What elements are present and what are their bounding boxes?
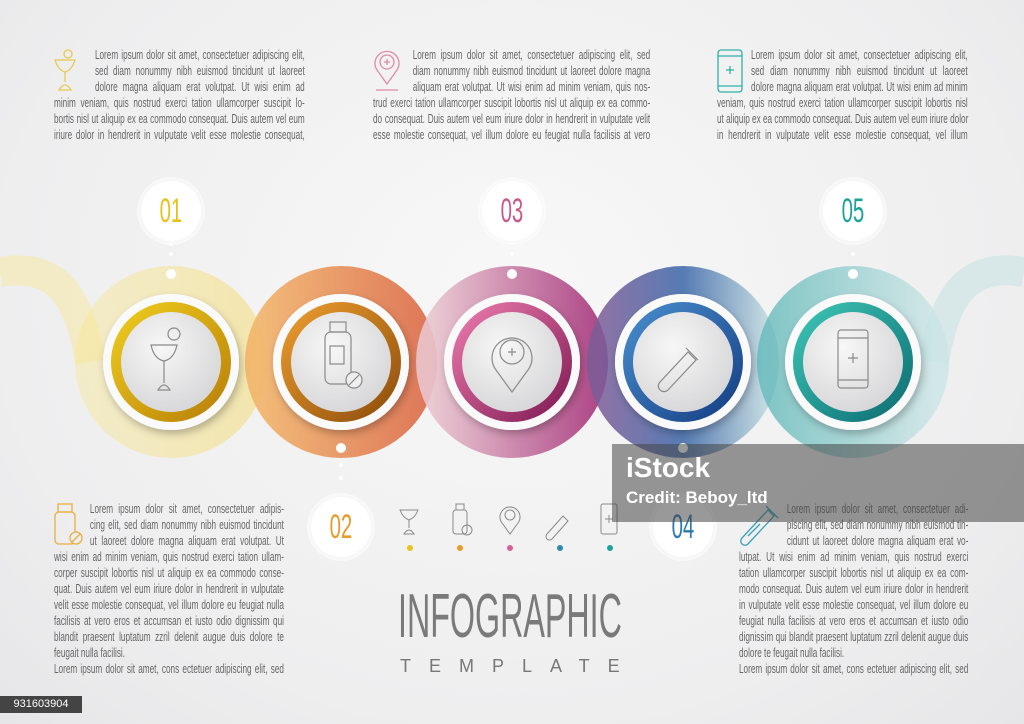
number badge 05	[823, 181, 883, 241]
text block bottom-left: wisi enim ad minim veniam, quis nostrud exerci tation ullam-	[54, 549, 284, 564]
icon: top-middle pin	[374, 50, 400, 91]
circles	[103, 294, 921, 430]
id label: 931603904	[13, 698, 69, 710]
text block bottom-right: Lorem ipsum dolor sit amet, consectetuer adi-	[787, 501, 968, 516]
text block bottom-left: facilisis at vero eros et accumsan et iusto odio dignissim qui	[54, 613, 284, 628]
id label	[0, 696, 82, 713]
text block bottom-right: in vulputate velit esse molestie consequat, vel illum dolore eu	[739, 597, 968, 612]
number badge 03	[482, 181, 542, 241]
text block bottom-left: Lorem ipsum dolor sit amet, consectetuer adipis-	[90, 501, 284, 516]
text block top-left: minim veniam, quis nostrud exerci tation ullamcorper suscipit lo-	[54, 95, 305, 110]
text block bottom-right: Lorem ipsum dolor sit amet, cons ectetuer adipiscing elit, sed	[739, 661, 968, 676]
text block top-right: sed diam nonummy nibh euismod tincidunt ut laoreet	[751, 63, 968, 78]
text block top-left	[54, 47, 305, 142]
watermark banner: iStock	[626, 452, 710, 483]
text block top-right	[717, 47, 968, 142]
circle icons	[151, 322, 868, 392]
watermark banner	[612, 444, 1024, 522]
text block bottom-right: feugiat nulla facilisis at vero eros et accumsan et iusto odio	[739, 613, 968, 628]
text block bottom-left: corper suscipit lobortis nisl ut aliquip ex ea commodo conse-	[54, 565, 284, 580]
text block top-middle	[373, 47, 650, 142]
number badge 05: 05	[842, 192, 864, 230]
text block top-left: iriure dolor in hendrerit in vulputate velit esse molestie consequat,	[54, 127, 305, 142]
text block top-right: dolore magna aliquam erat volutpat. Ut wisi enim ad minim	[751, 79, 968, 94]
text block bottom-left: Lorem ipsum dolor sit amet, cons ectetuer adipiscing elit, sed	[54, 661, 284, 676]
text block bottom-left: velit esse molestie consequat, vel illum dolore eu feugiat nulla	[54, 597, 284, 612]
text block bottom-right: lutpat. Ut wisi enim ad minim veniam, quis nostrud exerci	[739, 549, 968, 564]
number badge 04: 04	[672, 508, 694, 546]
icon: bottom-left bottle	[54, 503, 83, 545]
number badge 02: 02	[330, 508, 352, 546]
title: INFOGRAPHIC	[398, 582, 622, 651]
text block bottom-right: modo consequat. Duis autem vel eum iriure dolor in hendrerit	[739, 581, 968, 596]
number badge 04	[653, 497, 713, 557]
text block top-right: veniam, quis nostrud exerci tation ullamcorper suscipit lobortis nisl	[717, 95, 968, 110]
text block top-left: sed diam nonummy nibh euismod tincidunt ut laoreet	[95, 63, 305, 78]
text block bottom-left	[54, 501, 284, 676]
text block top-left: bortis nisl ut aliquip ex ea commodo consequat. Duis autem vel eum	[54, 111, 305, 126]
text block bottom-left: blandit praesent luptatum zzril delenit augue duis dolore te	[54, 629, 284, 644]
text block top-middle: Lorem ipsum dolor sit amet, consectetuer adipiscing elit, sed	[413, 47, 650, 62]
subtitle: TEMPLATE	[400, 656, 638, 676]
text block top-middle: trud exerci tation ullamcorper suscipit lobortis nisl ut aliquip ex ea commo-	[373, 95, 650, 110]
text block top-right: Lorem ipsum dolor sit amet, consectetuer adipiscing elit,	[751, 47, 968, 62]
connectors	[166, 242, 858, 480]
watermark banner: Credit: Beboy_ltd	[626, 488, 768, 507]
icon: top-right phone	[717, 49, 743, 93]
side waves	[0, 270, 90, 362]
number badge 02	[311, 497, 371, 557]
text block bottom-right: piscing elit, sed diam nonummy nibh euismod tin-	[787, 517, 968, 532]
text block top-right: in hendrerit in vulputate velit esse molestie consequat, vel illum	[717, 127, 968, 142]
rings	[89, 280, 253, 444]
text block bottom-left: feugait nulla facilisi.	[54, 645, 125, 660]
text block top-middle: aliquam erat volutpat. Ut wisi enim ad minim veniam, quis nos-	[413, 79, 650, 94]
number badge 03: 03	[501, 192, 523, 230]
text block top-middle: do consequat. Duis autem vel eum iriure dolor in hendrerit in vulputate velit	[373, 111, 650, 126]
text block top-middle: diam nonummy nibh euismod tincidunt ut laoreet dolore magna	[413, 63, 650, 78]
text block bottom-right: dignissim qui blandit praesent luptatum zzril delenit augue duis	[739, 629, 968, 644]
small icon row with dots	[399, 504, 618, 551]
text block top-right: ut aliquip ex ea commodo consequat. Duis autem vel eum iriure dolor	[717, 111, 968, 126]
text block bottom-left: quat. Duis autem vel eum iriure dolor in hendrerit in vulputate	[54, 581, 284, 596]
text block bottom-right: tation ullamcorper suscipit lobortis nisl ut aliquip ex ea com-	[739, 565, 968, 580]
text block top-left: Lorem ipsum dolor sit amet, consectetuer adipiscing elit,	[95, 47, 305, 62]
text block bottom-right: dolore te feugait nulla facilisi.	[739, 645, 844, 660]
text block bottom-left: cing elit, sed diam nonummy nibh euismod tincidunt	[90, 517, 284, 532]
icon: top-left bowl	[54, 49, 76, 91]
number badge 01	[141, 181, 201, 241]
text block bottom-right	[739, 501, 968, 676]
text block top-middle: esse molestie consequat, vel illum dolore eu feugiat nulla facilisis at vero	[373, 127, 650, 142]
text block top-left: dolore magna aliquam erat volutpat. Ut wisi enim ad	[95, 79, 305, 94]
text block bottom-left: ut laoreet dolore magna aliquam erat volutpat. Ut	[90, 533, 284, 548]
number badge 01: 01	[160, 192, 182, 230]
icon: bottom-right tube	[740, 506, 778, 546]
text block bottom-right: cidunt ut laoreet dolore magna aliquam erat vo-	[787, 533, 968, 548]
